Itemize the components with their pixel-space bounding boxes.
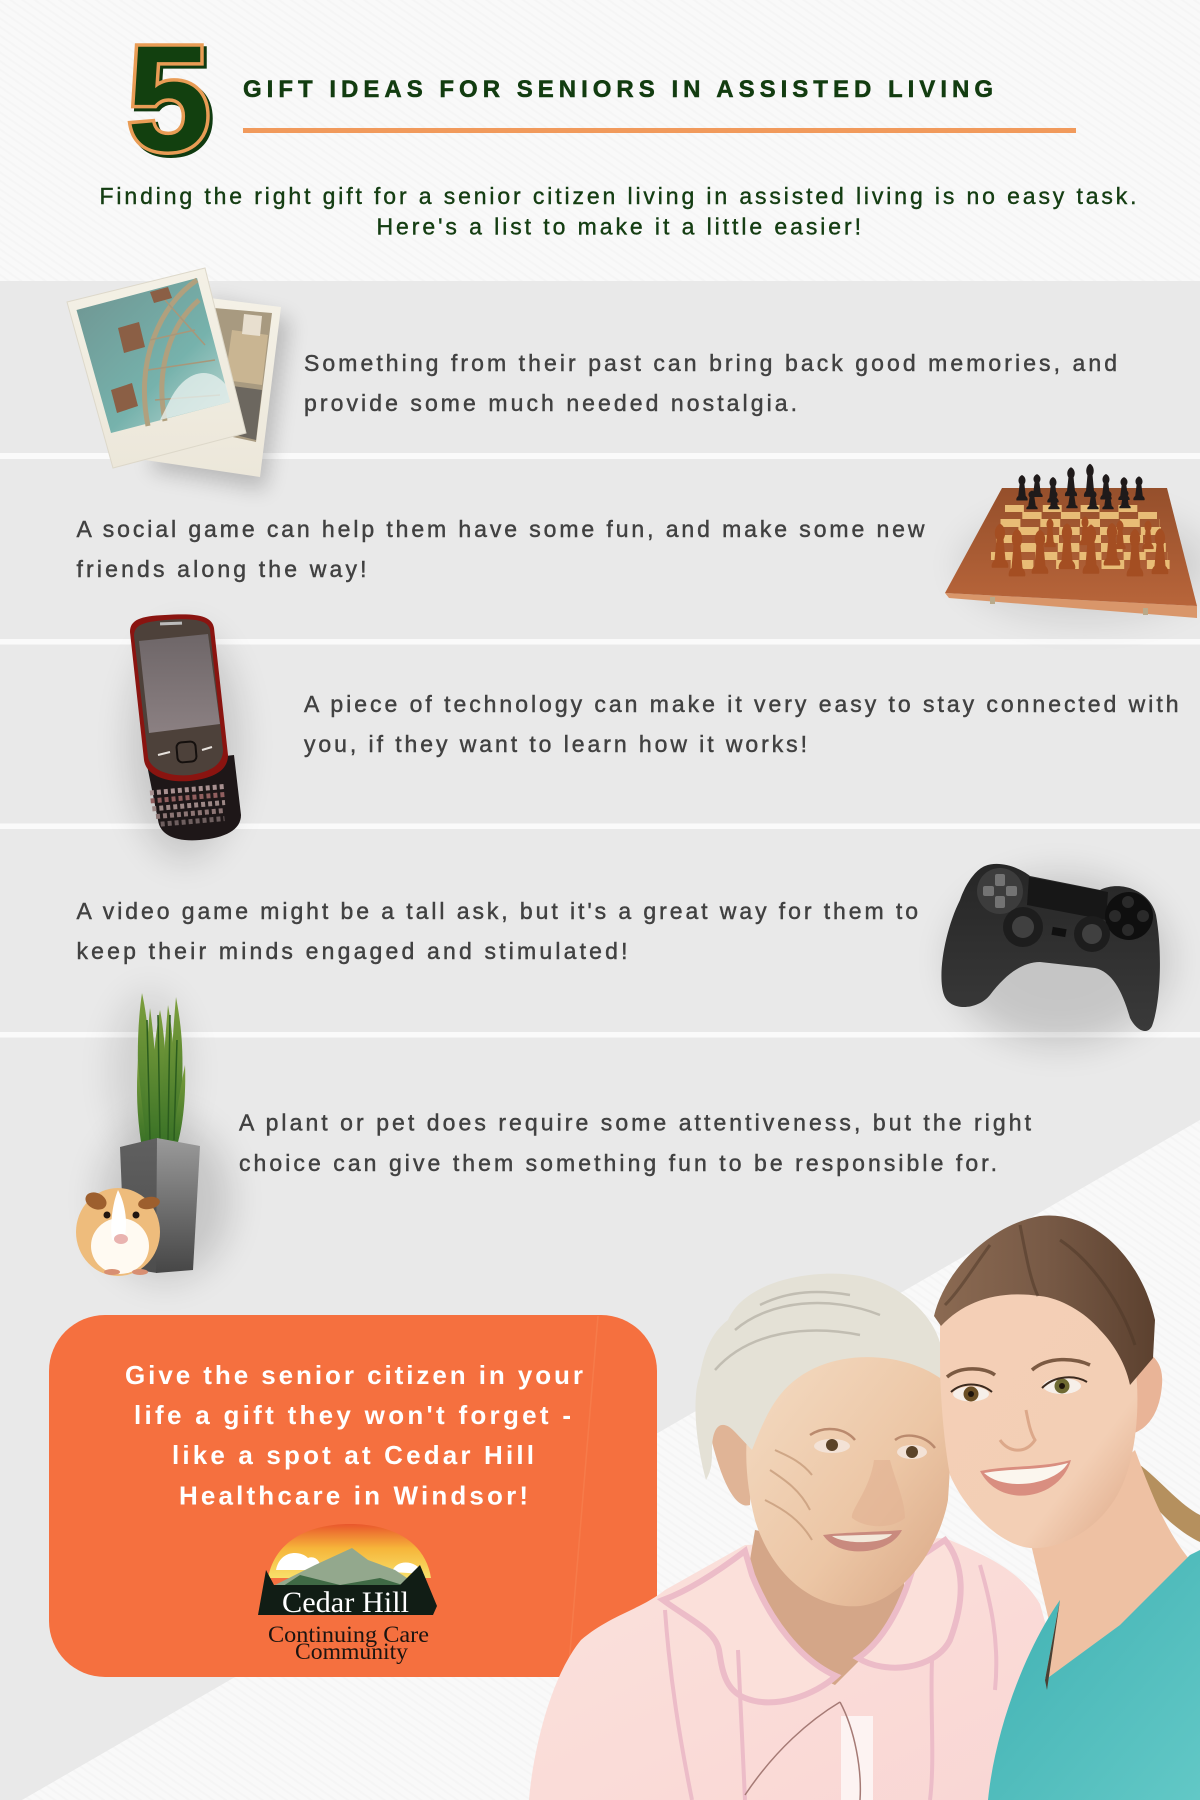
intro text [100, 183, 1137, 240]
text: row 1 [304, 350, 1117, 416]
call to action text: Give the senior citizen in your [125, 1360, 583, 1390]
text: row 1: provide some much needed nostalgia. [304, 390, 797, 416]
icon: mobile phone [130, 614, 241, 860]
logo: Cedar Hill: Community [295, 1639, 409, 1664]
text: row 4 [76, 898, 918, 964]
textured header band [0, 0, 1200, 281]
text: row 3: A piece of technology can make it very easy to stay connected with [304, 691, 1178, 717]
intro text: Finding the right gift for a senior citizen living in assisted living is no easy task. [100, 183, 1137, 209]
text: row 2: A social game can help them have some fun, and make some new [76, 516, 925, 542]
text: row 1: Something from their past can bring back good memories, and [304, 350, 1117, 376]
icon: chess board [945, 464, 1200, 620]
photo: senior woman and caregiver [529, 1216, 1200, 1800]
panel: call to action [49, 1315, 657, 1677]
text: row 4: A video game might be a tall ask, but it's a great way for them to [76, 898, 918, 924]
icon: plant and guinea pig [76, 992, 230, 1280]
text: row 3 [304, 691, 1178, 757]
call to action text: Healthcare in Windsor! [179, 1480, 528, 1510]
title: GIFT IDEAS FOR SENIORS IN ASSISTED LIVING [243, 76, 993, 103]
title number 5: 5 [130, 17, 213, 185]
text: row 5: choice can give them something fun to be responsible for. [239, 1150, 997, 1176]
senior woman [529, 1274, 1050, 1800]
text: row 5 [239, 1110, 1032, 1176]
title underline [243, 128, 1076, 133]
text: row 5: A plant or pet does require some attentiveness, but the right [239, 1110, 1032, 1136]
logo: Cedar Hill: Continuing Care [268, 1622, 429, 1647]
icon: polaroid photos [67, 268, 290, 490]
logo: Cedar Hill: Cedar Hill [282, 1586, 409, 1619]
textured diagonal background [22, 1120, 1200, 1800]
text: row 2 [76, 516, 925, 582]
text: row 4: keep their minds engaged and stimulated! [76, 938, 628, 964]
call to action text: life a gift they won't forget - [134, 1400, 571, 1430]
text: row 3: you, if they want to learn how it works! [304, 731, 807, 757]
call to action text: like a spot at Cedar Hill [172, 1440, 534, 1470]
icon: game controller [941, 864, 1170, 1045]
text: row 2: friends along the way! [76, 556, 366, 582]
caregiver [934, 1216, 1200, 1800]
intro text: Here's a list to make it a little easier! [376, 214, 861, 240]
logo: Cedar Hill [258, 1524, 437, 1664]
call to action text [125, 1360, 583, 1510]
title number 5: 5 [127, 14, 210, 182]
